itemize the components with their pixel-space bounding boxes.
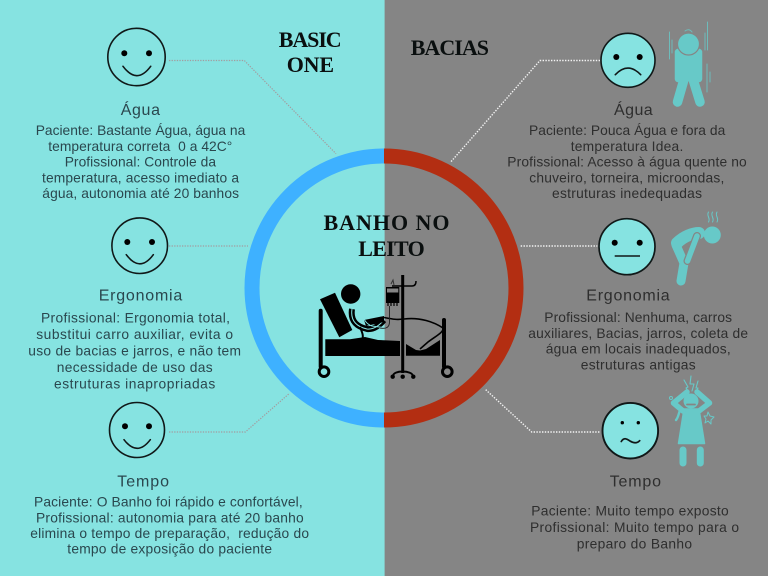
heading: Água: Água	[614, 100, 653, 119]
icon: stressed woman	[670, 376, 714, 463]
text block: time drawbacks: preparo do Banho	[577, 536, 692, 551]
text block: ergonomics drawbacks	[528, 310, 748, 372]
text block: water benefits: temperatura correta 0 a 42C°	[48, 139, 232, 154]
title: BANHO NO LEITO: LEITO	[358, 236, 425, 261]
text block: time benefits	[30, 494, 309, 557]
text block: water drawbacks: temperatura Idea.	[571, 139, 683, 154]
panel: left column content	[28, 28, 309, 557]
connector lines left	[169, 60, 336, 432]
text block: ergonomics benefits: Profissional: Ergonomia total,	[41, 311, 230, 326]
text block: ergonomics drawbacks: água em locais inadequados,	[546, 342, 731, 357]
blanket line	[384, 318, 443, 349]
title: BASIC ONE: ONE	[287, 52, 334, 77]
text block: water benefits: água, autonomia até 20 banhos	[42, 186, 239, 201]
text block: water benefits: Profissional: Controle da	[65, 154, 216, 170]
text block: water benefits: temperatura, acesso imediato a	[42, 170, 239, 185]
text block: ergonomics drawbacks: estruturas antigas	[581, 357, 696, 372]
icon: patient in hospital bed	[319, 275, 452, 379]
heading: Tempo: Tempo	[117, 473, 169, 490]
central ring	[252, 156, 516, 420]
text block: time benefits: tempo de exposição do paciente	[67, 542, 272, 557]
text block: water drawbacks: estruturas inedequadas	[552, 186, 702, 201]
IV bag	[386, 287, 399, 303]
text block: ergonomics drawbacks: Profissional: Nenhuma, carros	[544, 310, 732, 325]
text block: ergonomics benefits: substitui carro auxiliar, evita o	[36, 327, 233, 342]
text block: time benefits: elimina o tempo de preparação, redução do	[30, 526, 309, 541]
text block: water drawbacks	[507, 122, 747, 201]
headrest	[320, 293, 352, 337]
bed posts and wheels	[321, 311, 444, 367]
title: BASIC ONE	[279, 27, 342, 77]
icon: happy face time	[110, 402, 164, 458]
title: BANHO NO LEITO	[324, 210, 450, 261]
text block: time benefits: Profissional: autonomia para até 20 banho	[36, 510, 304, 525]
text block: time drawbacks: Profissional: Muito tempo para o	[530, 520, 739, 535]
icon: happy face ergonomics	[112, 218, 168, 274]
title: BACIAS: BACIAS	[411, 35, 489, 60]
IV pole	[401, 275, 404, 373]
icon: worried face time	[602, 403, 658, 459]
icon: happy face water	[108, 28, 165, 86]
panel: right background	[385, 0, 768, 576]
icon: sad face water	[601, 33, 655, 87]
text block: ergonomics drawbacks: auxiliares, Bacias, jarros, coleta de	[528, 326, 748, 341]
text block: time drawbacks: Paciente: Muito tempo exposto	[531, 504, 729, 519]
patient body and arm	[352, 309, 384, 329]
panel: right column content	[507, 22, 748, 551]
text block: ergonomics benefits: necessidade de uso das	[57, 360, 213, 375]
text block: ergonomics benefits: uso de bacias e jarros, e não tem	[28, 344, 241, 359]
IV tube	[380, 306, 390, 328]
heading: Água: Água	[121, 100, 160, 119]
icon: neutral face ergonomics	[599, 219, 655, 275]
text block: ergonomics benefits: estruturas inapropriadas	[54, 376, 215, 391]
text block: time drawbacks	[530, 504, 739, 551]
heading: Ergonomia: Ergonomia	[99, 287, 182, 304]
title: BASIC ONE: BASIC	[279, 27, 342, 52]
panel: left background	[0, 0, 385, 576]
text block: water drawbacks: Paciente: Pouca Água e fora da	[529, 122, 726, 138]
text block: time benefits: Paciente: O Banho foi rápido e confortável,	[34, 494, 303, 509]
title: BANHO NO LEITO: BANHO NO	[324, 210, 450, 235]
text block: water drawbacks: chuveiro, torneira, microondas,	[529, 170, 724, 185]
connector lines right	[451, 60, 600, 432]
text block: water benefits: Paciente: Bastante Água, água na	[36, 122, 246, 138]
text block: water drawbacks: Profissional: Acesso à água quente no	[507, 154, 747, 170]
text block: ergonomics benefits	[28, 311, 241, 391]
icon: person shivering	[670, 22, 710, 102]
icon: person bent over in pain	[676, 212, 721, 281]
heading: Tempo: Tempo	[610, 473, 661, 490]
heading: Ergonomia: Ergonomia	[586, 287, 670, 304]
text block: water benefits	[36, 122, 246, 201]
mattress	[325, 337, 400, 356]
patient head	[341, 284, 360, 304]
